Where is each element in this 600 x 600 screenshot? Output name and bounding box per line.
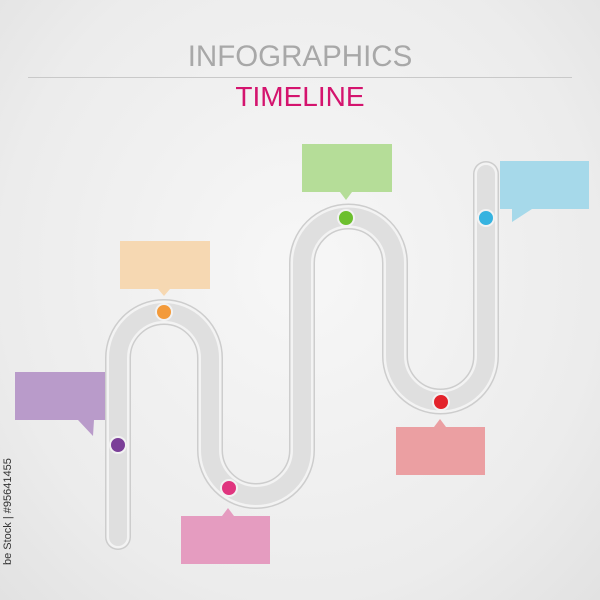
callout: purple (15, 372, 105, 436)
callout: green (302, 144, 392, 200)
subtitle: TIMELINE: TIMELINE (235, 81, 365, 112)
callout: pink (181, 508, 270, 564)
tube path (118, 174, 486, 537)
callout: red (396, 419, 485, 475)
title: INFOGRAPHICS: INFOGRAPHICS (188, 40, 412, 73)
callout: orange (120, 241, 210, 296)
callout: blue (500, 161, 589, 222)
markers (110, 210, 494, 496)
watermark id: be Stock | #95641455 (2, 458, 14, 565)
